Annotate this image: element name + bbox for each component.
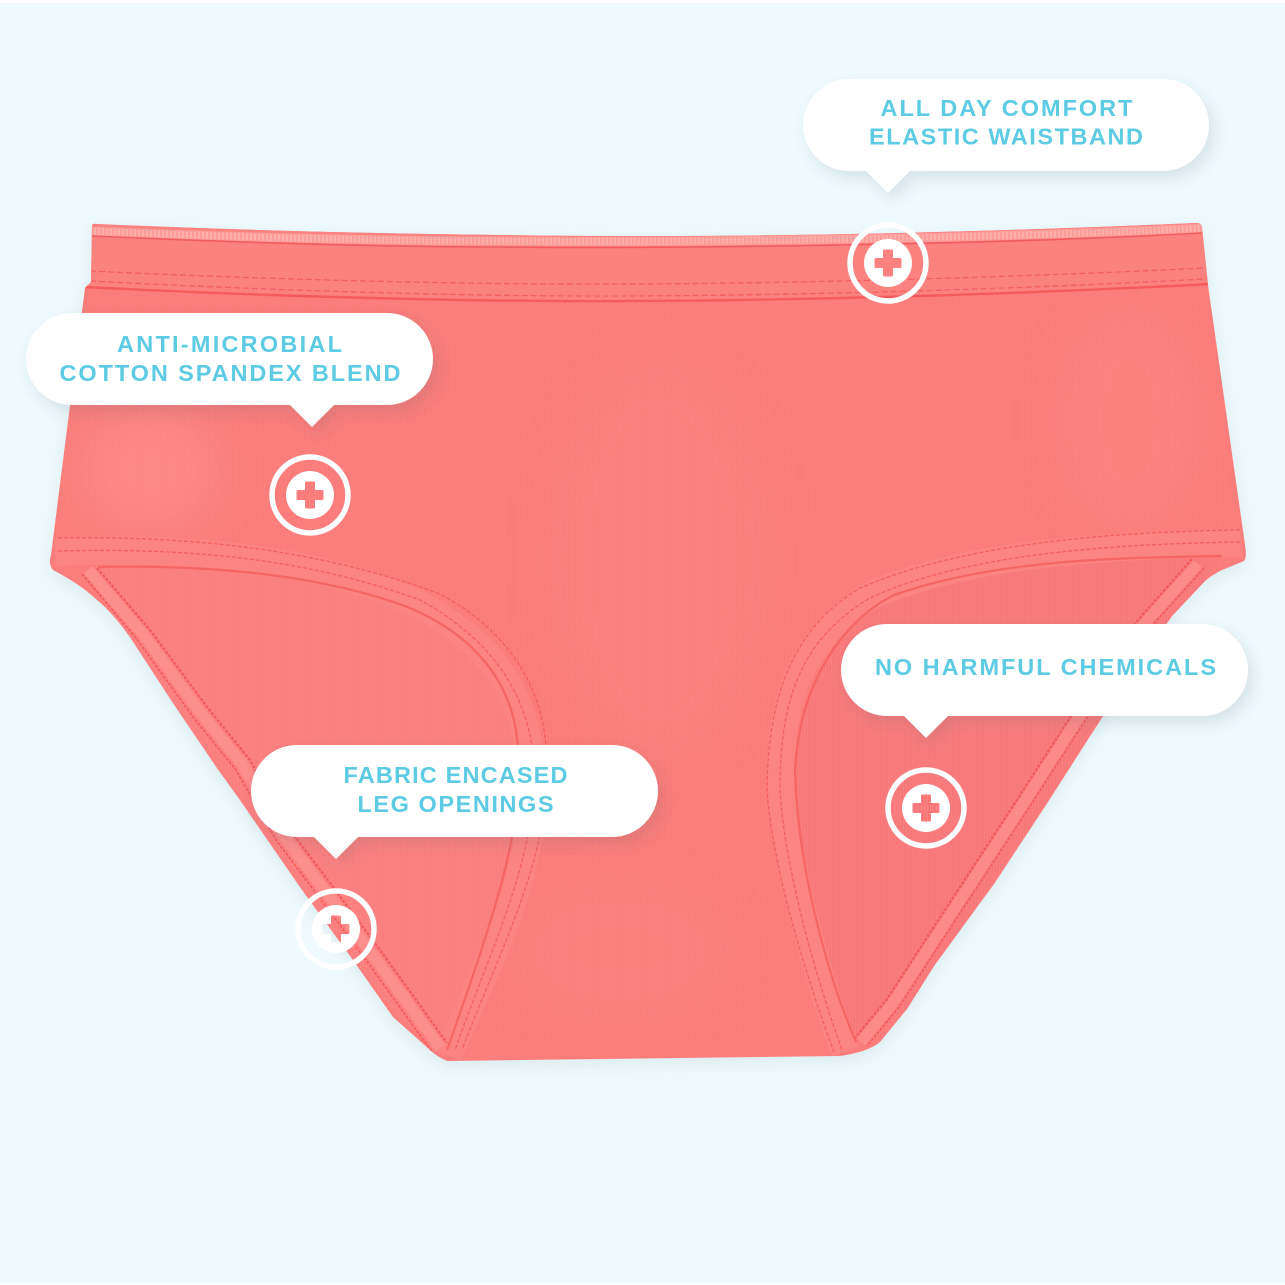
callout text: COTTON SPANDEX BLEND [60, 360, 400, 386]
right inner back panel [906, 580, 1206, 1010]
left edge overlock seam [88, 570, 440, 1048]
marker: no harmful chemicals [888, 770, 964, 846]
callout text: NO HARMFUL CHEMICALS [875, 654, 1216, 680]
callout: anti-microbial [26, 313, 433, 427]
marker: leg openings [298, 891, 374, 967]
callout text [60, 331, 400, 386]
fabric mottling [95, 424, 205, 516]
left leg opening band [55, 550, 532, 1055]
garment silhouette [50, 223, 1246, 1061]
marker: fabric blend [272, 457, 348, 533]
marker: waistband [850, 225, 926, 301]
right edge overlock seam [861, 564, 1198, 1042]
callout text: LEG OPENINGS [358, 791, 554, 817]
waistband seam [85, 284, 1210, 301]
garment: coral briefs [40, 220, 1250, 1065]
callout text [869, 95, 1143, 150]
callout text: ANTI-MICROBIAL [117, 331, 342, 357]
left inner back panel [106, 608, 340, 942]
callout text [344, 762, 568, 817]
callout text: ELASTIC WAISTBAND [869, 124, 1143, 150]
fabric rib texture [40, 220, 1250, 1065]
waistband [86, 223, 1208, 287]
callout: fabric encased [251, 745, 658, 859]
garment details [40, 220, 1250, 1065]
callout text: ALL DAY COMFORT [880, 95, 1133, 121]
right leg opening band [781, 543, 1242, 1052]
callout text: FABRIC ENCASED [344, 762, 568, 788]
callout: no harmful chemicals [841, 624, 1248, 738]
callout: all day comfort [803, 79, 1209, 193]
waistband picot edge [90, 228, 1204, 241]
